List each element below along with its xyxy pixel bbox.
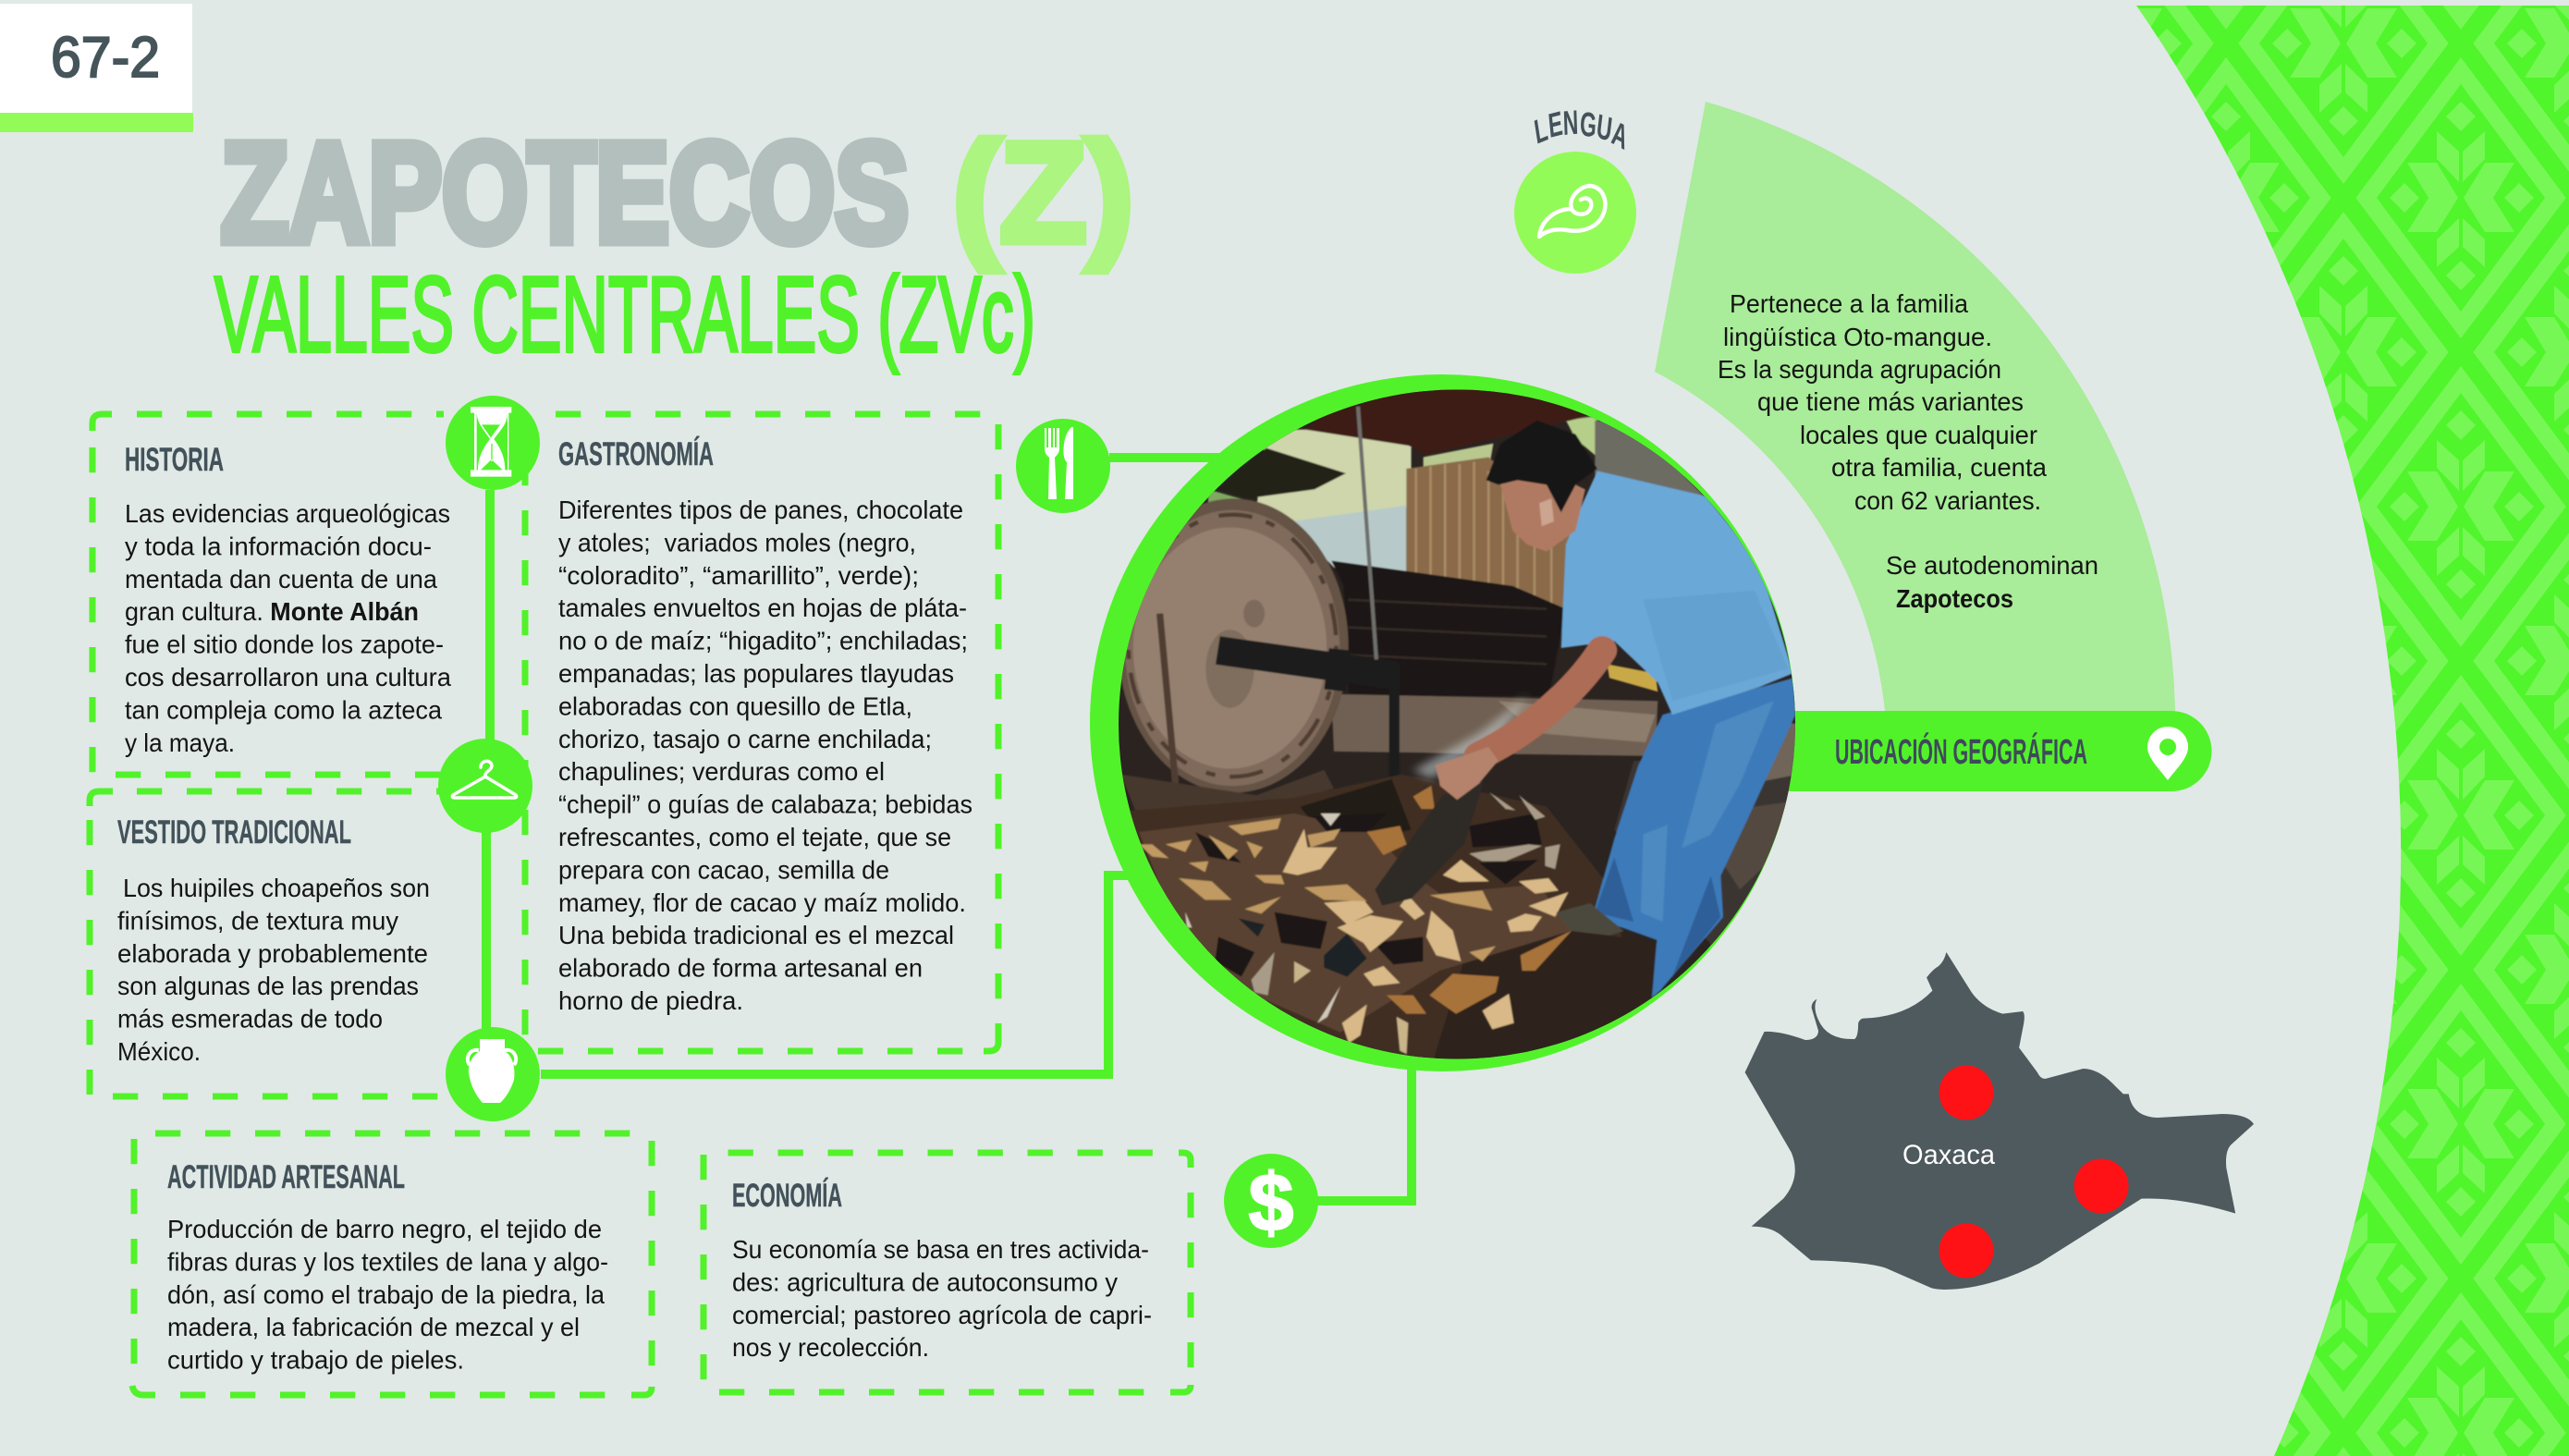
panel: lengua fan — [1655, 102, 2175, 711]
panel: economia — [703, 1153, 1191, 1392]
page number tab: 67-2 — [51, 26, 160, 90]
text: vestido tradicional — [117, 874, 430, 1066]
text: gastronomia: refrescantes, como el tejate, que se — [558, 823, 951, 851]
text: gastronomia: empanadas; las populares tlayudas — [558, 659, 954, 688]
heading: gastronomia: GASTRONOMÍA — [558, 435, 714, 472]
photo: ground and pile — [1130, 775, 1621, 1058]
text: lengua: locales que cualquier — [1800, 421, 2037, 449]
panel: gastronomia — [525, 414, 998, 1051]
text: vestido tradicional: finísimos, de textura muy — [117, 906, 398, 935]
text: historia: y la maya. — [125, 728, 235, 757]
map marker — [2074, 1159, 2128, 1213]
text: lengua: Se autodenominan — [1886, 551, 2098, 580]
text: lengua: lingüística Oto-mangue. — [1723, 323, 1992, 351]
text: economia — [732, 1235, 1152, 1362]
map label: Oaxaca — [1902, 1140, 1995, 1170]
text: lengua: Es la segunda agrupación — [1718, 355, 2001, 384]
icon: map pin — [2147, 727, 2188, 780]
text: lengua: Zapotecos — [1896, 584, 2013, 613]
icon: fork and knife — [1016, 419, 1110, 513]
heading: vestido tradicional: VESTIDO TRADICIONAL — [117, 814, 351, 850]
text: gastronomia: tamales envueltos en hojas de pláta- — [558, 593, 967, 622]
text: vestido tradicional: México. — [117, 1037, 201, 1066]
icon: lengua label: LENGUA — [1532, 103, 1631, 157]
heading: actividad artesanal: ACTIVIDAD ARTESANAL — [167, 1159, 405, 1195]
heading: economia: ECONOMÍA — [732, 1177, 842, 1214]
text: actividad artesanal: curtido y trabajo de pieles. — [167, 1346, 464, 1375]
text: lengua — [1718, 289, 2098, 613]
connector lines — [486, 458, 1412, 1201]
photo: axle — [1217, 650, 1397, 676]
text: gastronomia: mamey, flor de cacao y maíz molido. — [558, 888, 966, 917]
text: actividad artesanal: dón, así como el trabajo de la piedra, la — [167, 1280, 605, 1309]
text: vestido tradicional: Los huipiles choapeños son — [123, 874, 430, 902]
text: economia: Su economía se basa en tres activida- — [732, 1235, 1149, 1264]
banner: ubicacion geografica — [1756, 711, 2211, 791]
text: lengua: con 62 variantes. — [1854, 486, 2041, 515]
icon: dollar: $ — [1249, 1156, 1293, 1248]
text: gastronomia: elaborado de forma artesanal en — [558, 954, 923, 983]
photo: head — [1500, 471, 1585, 552]
text: vestido tradicional: más esmeradas de todo — [117, 1005, 383, 1034]
text: gastronomia — [558, 496, 973, 1015]
title: Zapotecos: (Z) — [953, 114, 1133, 272]
banner: ubicacion geografica: UBICACIÓN GEOGRÁFICA — [1835, 731, 2087, 772]
icon: hanger — [438, 739, 532, 833]
photo: stone wheel — [1119, 498, 1349, 793]
text: gastronomia: “chepil” o guías de calabaza; bebidas — [558, 790, 973, 819]
text: gastronomia: y atoles; variados moles (negro, — [558, 528, 916, 557]
icon: hourglass — [446, 396, 540, 490]
photo: smoke — [1413, 696, 1527, 779]
text: actividad artesanal: fibras duras y los textiles de lana y algo- — [167, 1247, 608, 1276]
icon: speech swirl — [1514, 152, 1636, 274]
text: historia: tan compleja como la azteca — [125, 695, 442, 724]
text: gastronomia: horno de piedra. — [558, 986, 743, 1015]
photo: shirt — [1561, 471, 1793, 715]
text: historia: y toda la información docu- — [125, 532, 432, 560]
text: gastronomia: chorizo, tasajo o carne enchilada; — [558, 725, 932, 753]
text: historia — [125, 499, 451, 757]
heading: historia: HISTORIA — [125, 442, 224, 478]
panel: actividad artesanal — [132, 1133, 652, 1395]
text: gastronomia: no o de maíz; “higadito”; enchiladas; — [558, 627, 968, 655]
text: economia: comercial; pastoreo agrícola de capri- — [732, 1301, 1152, 1329]
woven pattern band — [2136, 6, 2569, 1456]
text: historia: Las evidencias arqueológicas — [125, 499, 450, 528]
photo: man's trousers — [1593, 678, 1795, 997]
text: lengua: otra familia, cuenta — [1831, 453, 2047, 482]
subtitle: Valles Centrales: VALLES CENTRALES (ZVc) — [214, 254, 1035, 374]
photo background — [1256, 430, 1412, 526]
text: vestido tradicional: son algunas de las prendas — [117, 972, 419, 1000]
text: gastronomia: chapulines; verduras como el — [558, 757, 885, 786]
text: actividad artesanal — [167, 1215, 608, 1375]
text: economia: nos y recolección. — [732, 1333, 929, 1362]
text: actividad artesanal: madera, la fabricación de mezcal y el — [167, 1313, 580, 1341]
icon: lengua label — [1514, 103, 1636, 274]
photo: man tending mezcal agave oven — [1090, 374, 1812, 1072]
icon: clay jug — [446, 1027, 540, 1121]
text: gastronomia: “coloradito”, “amarillito”, verde); — [558, 561, 919, 590]
text: economia: des: agricultura de autoconsumo y — [732, 1267, 1118, 1296]
map: Oaxaca — [1745, 952, 2254, 1290]
text: historia: gran cultura. Monte Albán — [125, 597, 419, 626]
photo: arm and hand — [1479, 650, 1602, 756]
text: vestido tradicional: elaborada y probablemente — [117, 939, 428, 968]
text: lengua: Pertenece a la familia — [1730, 289, 1968, 318]
icon: dollar — [1224, 1154, 1318, 1248]
text: lengua: que tiene más variantes — [1757, 387, 2024, 416]
page number tab — [0, 4, 193, 132]
map marker — [1939, 1065, 1993, 1120]
map marker — [1939, 1224, 1993, 1278]
text: historia: fue el sitio donde los zapote- — [125, 630, 444, 659]
text: gastronomia: Una bebida tradicional es el mezcal — [558, 921, 954, 949]
panel: vestido tradicional — [90, 791, 444, 1096]
text: gastronomia: Diferentes tipos de panes, chocolate — [558, 496, 963, 524]
text: gastronomia: elaboradas con quesillo de Etla, — [558, 691, 912, 720]
text: historia: cos desarrollaron una cultura — [125, 663, 451, 691]
text: gastronomia: prepara con cacao, semilla de — [558, 855, 889, 884]
photo: held agave — [1375, 781, 1484, 906]
panel: historia — [92, 414, 451, 775]
photo: agave pieces — [1139, 786, 1572, 1054]
text: historia: mentada dan cuenta de una — [125, 565, 437, 593]
text: actividad artesanal: Producción de barro negro, el tejido de — [167, 1215, 602, 1243]
title: Zapotecos: ZAPOTECOS — [221, 114, 909, 272]
